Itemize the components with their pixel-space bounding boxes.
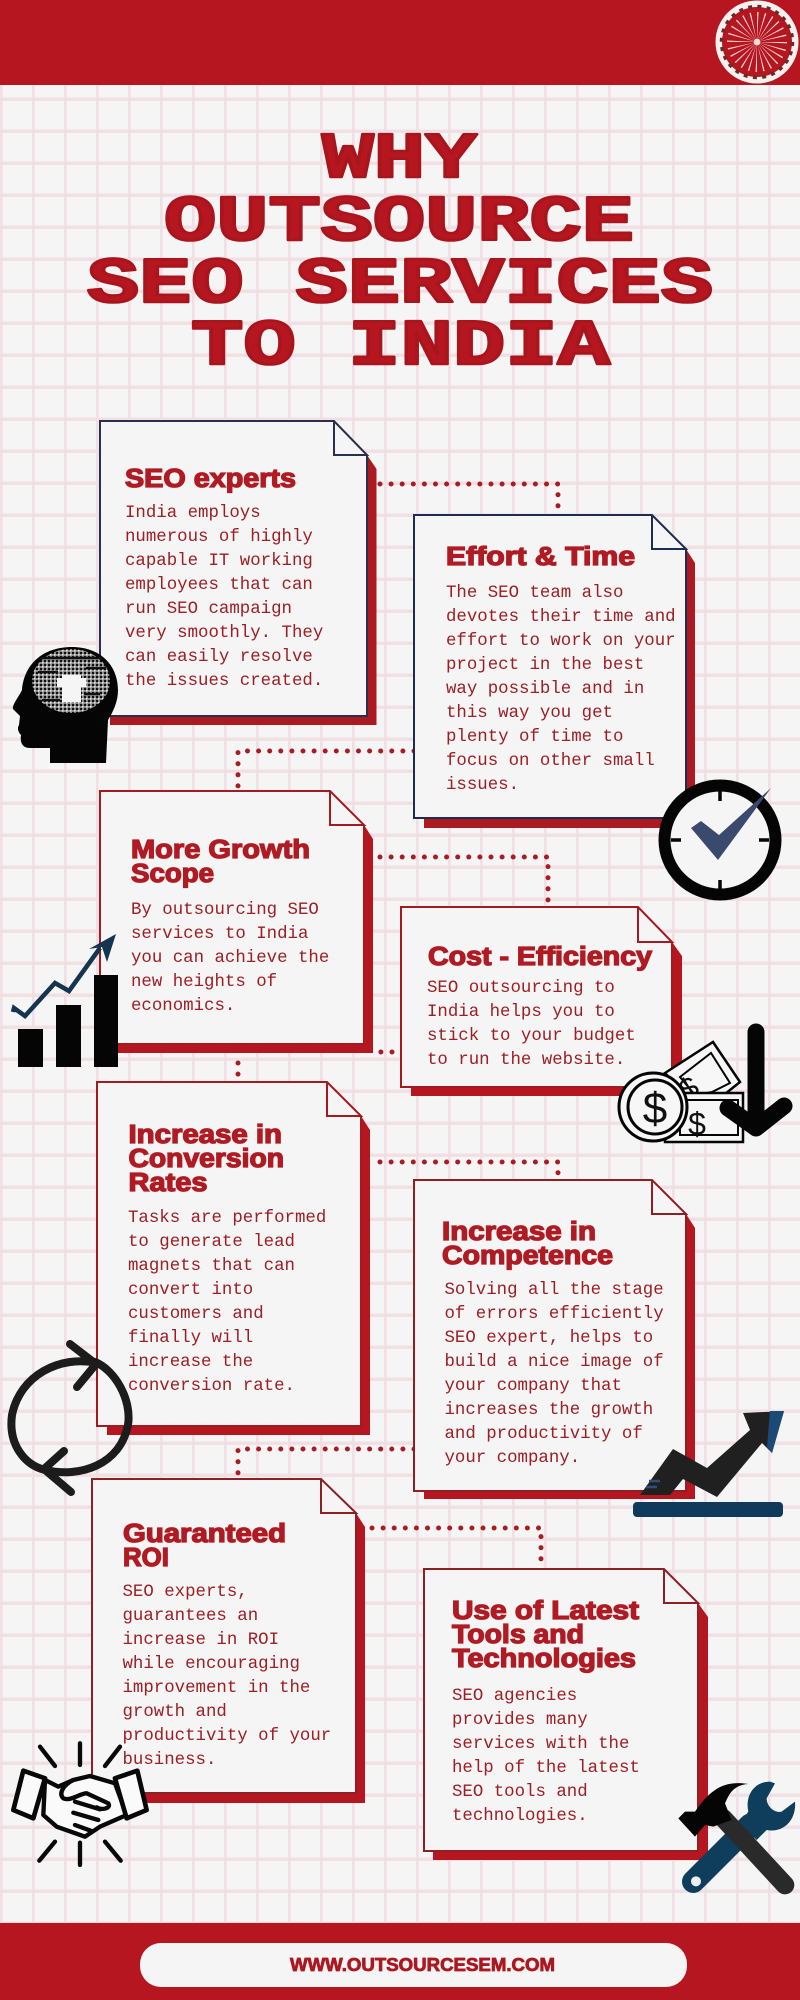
body text: convert into [128, 1281, 253, 1300]
body text: growth and [122, 1703, 227, 1722]
body text: can easily resolve [125, 648, 313, 667]
body text: increase the [128, 1353, 253, 1372]
body text: focus on other small [446, 752, 655, 771]
heading: Scope [131, 860, 214, 888]
title: TO INDIA [191, 310, 610, 384]
body text: issues. [446, 776, 519, 795]
body text: By outsourcing SEO [131, 901, 319, 920]
body text: employees that can [125, 576, 313, 595]
heading: Increase in [442, 1218, 596, 1246]
body text: SEO agencies [452, 1687, 577, 1706]
heading: Use of Latest [452, 1597, 640, 1625]
heading: Guaranteed [123, 1520, 286, 1548]
body text: India helps you to [427, 1003, 615, 1022]
body text: new heights of [131, 973, 277, 992]
panel: Use of Latest Tools and Technologies [424, 1569, 708, 1860]
body text [446, 584, 676, 795]
heading [442, 1218, 613, 1270]
body text: while encouraging [122, 1655, 300, 1674]
heading: Effort & Time [446, 543, 635, 571]
panel: Increase in Conversion Rates [97, 1082, 370, 1435]
icon: handshake [13, 1743, 147, 1865]
body text: conversion rate. [128, 1377, 295, 1396]
icon: money and down arrow: $ [674, 1070, 705, 1107]
heading: Rates [128, 1169, 208, 1197]
body text: the issues created. [125, 672, 323, 691]
icon: clock with check mark [664, 786, 776, 894]
panel: More Growth Scope [100, 791, 373, 1053]
body text: SEO expert, helps to [444, 1329, 653, 1348]
body text [444, 1281, 664, 1468]
icon: chakra emblem [716, 0, 798, 84]
heading [131, 836, 310, 888]
body text: stick to your budget [427, 1027, 636, 1046]
body text: help of the latest [452, 1759, 640, 1778]
body text: customers and [128, 1305, 264, 1324]
body text: you can achieve the [131, 949, 329, 968]
icon: bar chart with rising arrow [13, 934, 118, 1067]
panel: SEO experts [100, 421, 376, 725]
title: SEO SERVICES [87, 248, 713, 322]
body text: finally will [128, 1329, 253, 1348]
body text: devotes their time and [446, 608, 676, 627]
body text: improvement in the [122, 1679, 310, 1698]
body text: run SEO campaign [125, 600, 292, 619]
body text [122, 1583, 331, 1770]
body text: of errors efficiently [444, 1305, 664, 1324]
heading [128, 1121, 284, 1197]
body text [131, 901, 329, 1016]
icon: circular arrows [11, 1344, 129, 1492]
body text: increases the growth [444, 1401, 653, 1420]
body text: project in the best [446, 656, 644, 675]
body text: SEO outsourcing to [427, 979, 615, 998]
body text: very smoothly. They [125, 624, 323, 643]
website pill: WWW.OUTSOURCESEM.COM [290, 1955, 555, 1975]
body text: SEO experts, [122, 1583, 248, 1602]
heading [123, 1520, 286, 1572]
connector: More Growth to Cost Efficiency [380, 857, 548, 905]
title [87, 123, 713, 384]
body text: to generate lead [128, 1233, 295, 1252]
connector: SEO experts to Effort and Time [380, 484, 558, 515]
website pill [140, 1943, 687, 1987]
icon: money and down arrow [619, 1032, 784, 1142]
heading: Increase in [128, 1121, 282, 1149]
heading: ROI [123, 1544, 169, 1572]
heading: Cost - Efficiency [428, 943, 653, 971]
panel: Effort and Time [414, 515, 695, 828]
body text: guarantees an [122, 1607, 258, 1626]
title: OUTSOURCE [164, 186, 634, 260]
body text: effort to work on your [446, 632, 676, 651]
icon: hammer and wrench [678, 1782, 795, 1886]
heading: More Growth [131, 836, 310, 864]
body text: Solving all the stage [444, 1281, 664, 1300]
body text: capable IT working [125, 552, 313, 571]
body text: economics. [131, 997, 235, 1016]
top banner [0, 0, 800, 85]
panel: Cost Efficiency [401, 907, 682, 1096]
heading: Tools and [452, 1621, 584, 1649]
body text: The SEO team also [446, 584, 623, 603]
footer band [0, 1923, 800, 2000]
body text: numerous of highly [125, 528, 313, 547]
connector: Cost Efficiency to Conversion Rates [238, 1052, 392, 1080]
body text: India employs [125, 504, 261, 523]
body text: services to India [131, 925, 308, 944]
connector: Effort and Time to More Growth [238, 751, 414, 789]
body text: business. [122, 1751, 216, 1770]
connector: Guaranteed ROI to Latest Tools [372, 1528, 541, 1568]
panel: Increase in Competence [414, 1180, 695, 1499]
body text: this way you get [446, 704, 613, 723]
body text: SEO tools and [452, 1783, 588, 1802]
body text: build a nice image of [444, 1353, 664, 1372]
body text: increase in ROI [122, 1631, 279, 1650]
body text: way possible and in [446, 680, 644, 699]
body text [128, 1209, 326, 1396]
body text: plenty of time to [446, 728, 623, 747]
body text: provides many [452, 1711, 588, 1730]
body text [452, 1687, 640, 1826]
body text: technologies. [452, 1807, 588, 1826]
heading: Conversion [128, 1145, 284, 1173]
heading: SEO experts [125, 465, 296, 493]
body text: productivity of your [122, 1727, 331, 1746]
panel: Guaranteed ROI [92, 1479, 365, 1803]
title: WHY [322, 123, 477, 197]
heading: Competence [442, 1242, 613, 1270]
body text: your company that [444, 1377, 622, 1396]
body text: magnets that can [128, 1257, 295, 1276]
body text: your company. [444, 1449, 580, 1468]
heading: Technologies [452, 1645, 636, 1673]
body text: and productivity of [444, 1425, 643, 1444]
icon: trending arrow on base [633, 1411, 784, 1517]
icon: money and down arrow: $ [688, 1106, 706, 1142]
connector: Conversion Rates to Competence [380, 1162, 558, 1179]
body text: Tasks are performed [128, 1209, 326, 1228]
icon: money and down arrow: $ [643, 1084, 667, 1133]
body text: services with the [452, 1735, 629, 1754]
body text [125, 504, 323, 691]
connector: Competence to Guaranteed ROI [238, 1449, 414, 1478]
body text: to run the website. [427, 1051, 625, 1070]
body text [427, 979, 636, 1070]
icon: head with circuit brain [13, 647, 118, 763]
heading [452, 1597, 640, 1673]
